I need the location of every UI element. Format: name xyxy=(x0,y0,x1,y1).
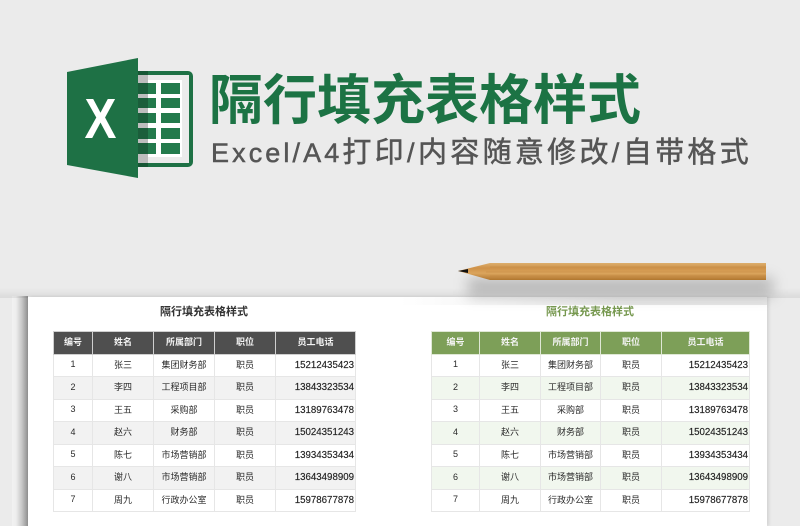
right table: green header: 13189763478 xyxy=(689,405,748,416)
right table: green header: 3 xyxy=(453,404,458,414)
left table: dark header: 姓名 xyxy=(114,337,132,347)
right table: green header: 1 xyxy=(453,359,458,369)
left table: dark header: 王五 xyxy=(114,405,132,415)
icon: pencil xyxy=(458,263,766,280)
left table: dark header: 员工电话 xyxy=(297,337,334,347)
left table: dark header: 市场营销部 xyxy=(161,450,206,460)
right table: green header: 职员 xyxy=(622,405,640,415)
right table: green header: 工程项目部 xyxy=(548,382,593,392)
subtitle: Excel/A4打印/内容随意修改/自带格式 xyxy=(211,129,752,171)
right table: green header: 15024351243 xyxy=(689,427,748,438)
left table: dark header: 周九 xyxy=(114,495,132,505)
left table: dark header: 15212435423 xyxy=(295,360,354,371)
right table: green header: 7 xyxy=(453,494,458,504)
back sheet shadow xyxy=(12,296,28,526)
left table: dark header: 7 xyxy=(70,494,76,504)
left table: dark header: 2 xyxy=(70,382,76,392)
right table: green header: 所属部门 xyxy=(552,337,588,347)
left table: dark header: 4 xyxy=(70,427,76,437)
right table: green header: 13643498909 xyxy=(689,472,748,483)
right table: green header: 市场营销部 xyxy=(548,450,593,460)
panel: spreadsheet sheet xyxy=(28,297,767,526)
left table: dark header: 15024351243 xyxy=(295,427,354,438)
right table: green header: 职位 xyxy=(622,337,640,347)
right table: green header: 6 xyxy=(453,472,458,482)
sheet top fade on the right xyxy=(400,297,767,305)
left table: dark header: 谢八 xyxy=(114,472,132,482)
right table: green header: 职员 xyxy=(622,495,640,505)
left table: dark header: 6 xyxy=(70,472,76,482)
left table: dark header: 市场营销部 xyxy=(161,472,206,482)
right table: green header: 赵六 xyxy=(501,427,519,437)
right table: green header: 市场营销部 xyxy=(548,472,593,482)
right table: green header: 编号 xyxy=(446,337,464,347)
right table: green header: 集团财务部 xyxy=(548,360,593,370)
right table title: 隔行填充表格样式 xyxy=(546,306,634,318)
left table: dark header xyxy=(53,331,356,512)
left table: dark header: 采购部 xyxy=(170,405,198,415)
right table: green header: 15212435423 xyxy=(689,360,748,371)
left table: dark header: 职员 xyxy=(236,450,254,460)
left table: dark header: 职位 xyxy=(236,337,254,347)
left table: dark header: 行政办公室 xyxy=(161,495,206,505)
right table: green header: 5 xyxy=(453,449,458,459)
top band shadow xyxy=(0,288,800,298)
right table: green header: 员工电话 xyxy=(687,337,724,347)
right table: green header: 周九 xyxy=(501,495,519,505)
left table: dark header: 13843323534 xyxy=(295,382,354,393)
right table: green header: 王五 xyxy=(501,405,519,415)
left table: dark header: 13934353434 xyxy=(295,450,354,461)
left table: dark header: 职员 xyxy=(236,360,254,370)
left table: dark header: 职员 xyxy=(236,472,254,482)
right table: green header: 李四 xyxy=(501,382,519,392)
right table: green header: 张三 xyxy=(501,360,519,370)
right table: green header: 职员 xyxy=(622,472,640,482)
icon: Excel logo xyxy=(67,58,193,178)
left table: dark header: 5 xyxy=(70,449,76,459)
left table: dark header: 职员 xyxy=(236,495,254,505)
right table: green header: 职员 xyxy=(622,427,640,437)
right table: green header: 财务部 xyxy=(557,427,584,437)
pencil shadow xyxy=(468,278,773,296)
left table: dark header: 财务部 xyxy=(170,427,198,437)
right table: green header: 陈七 xyxy=(501,450,519,460)
left table: dark header: 1 xyxy=(70,359,76,369)
right table: green header: 职员 xyxy=(622,382,640,392)
left table title: 隔行填充表格样式 xyxy=(160,306,248,318)
left table: dark header: 15978677878 xyxy=(295,495,354,506)
left table: dark header: 职员 xyxy=(236,427,254,437)
left table: dark header: 张三 xyxy=(114,360,132,370)
right table: green header: 职员 xyxy=(622,360,640,370)
right table: green header: 谢八 xyxy=(501,472,519,482)
right table: green header xyxy=(431,331,750,512)
right table: green header: 15978677878 xyxy=(689,495,748,506)
right table: green header: 13843323534 xyxy=(689,382,748,393)
icon: Excel logo: X xyxy=(85,87,116,151)
left table: dark header: 编号 xyxy=(64,337,82,347)
right table: green header: 职员 xyxy=(622,450,640,460)
left table: dark header: 职员 xyxy=(236,382,254,392)
right table: green header: 姓名 xyxy=(501,337,519,347)
right table: green header: 2 xyxy=(453,382,458,392)
left table: dark header: 职员 xyxy=(236,405,254,415)
left table: dark header: 工程项目部 xyxy=(161,382,206,392)
left table: dark header: 3 xyxy=(70,404,76,414)
left table: dark header: 李四 xyxy=(114,382,132,392)
left table: dark header: 13189763478 xyxy=(295,405,354,416)
title: 隔行填充表格样式 xyxy=(209,71,641,131)
right table: green header: 4 xyxy=(453,427,458,437)
left table: dark header: 13643498909 xyxy=(295,472,354,483)
left table: dark header: 所属部门 xyxy=(166,337,202,347)
right table: green header: 13934353434 xyxy=(689,450,748,461)
left table: dark header: 陈七 xyxy=(114,450,132,460)
left table: dark header: 集团财务部 xyxy=(161,360,206,370)
left table: dark header: 赵六 xyxy=(114,427,132,437)
right table: green header: 采购部 xyxy=(557,405,584,415)
right table: green header: 行政办公室 xyxy=(548,495,593,505)
